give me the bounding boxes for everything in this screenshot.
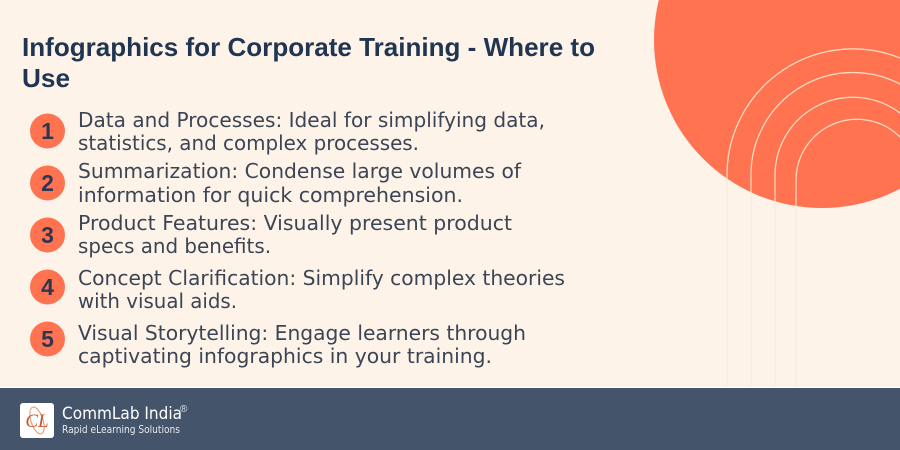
list item 2: 2 [41, 170, 54, 196]
list item 5: 5 [41, 326, 54, 352]
list item 4: Concept Clarification: Simplify complex theories [78, 266, 565, 290]
title: Use [22, 63, 70, 93]
logo: CommLab India: Rapid eLearning Solutions [62, 423, 180, 436]
list item 3: Product Features: Visually present product [78, 211, 512, 235]
list item 2: information for quick comprehension. [78, 183, 463, 207]
decorative orange circle with arcs [654, 0, 900, 386]
footer bar [0, 387, 900, 450]
list item 5: captivating infographics in your training. [78, 344, 492, 368]
logo: CommLab India: CommLab India [62, 404, 182, 423]
title: Infographics for Corporate Training - Where to [22, 32, 595, 62]
list item 5: Visual Storytelling: Engage learners through [78, 321, 526, 345]
title [22, 32, 595, 93]
list item 4: with visual aids. [78, 289, 237, 313]
list item 3 [30, 211, 512, 258]
logo: CommLab India: ® [180, 404, 188, 415]
list item 5 [30, 321, 526, 368]
list item 4: 4 [41, 274, 54, 300]
list item 1: Data and Processes: Ideal for simplifying data, [78, 108, 545, 132]
list item 4 [30, 266, 565, 313]
list item 1 [30, 108, 545, 155]
list item 3: 3 [41, 222, 54, 248]
list item 2 [30, 159, 522, 207]
list item 1: statistics, and complex processes. [78, 131, 419, 155]
list item 3: specs and benefits. [78, 234, 271, 258]
logo: CommLab India [20, 403, 188, 438]
list item 2: Summarization: Condense large volumes of [78, 159, 522, 183]
list item 1: 1 [41, 118, 54, 144]
logo: CommLab India: CL [25, 411, 49, 432]
